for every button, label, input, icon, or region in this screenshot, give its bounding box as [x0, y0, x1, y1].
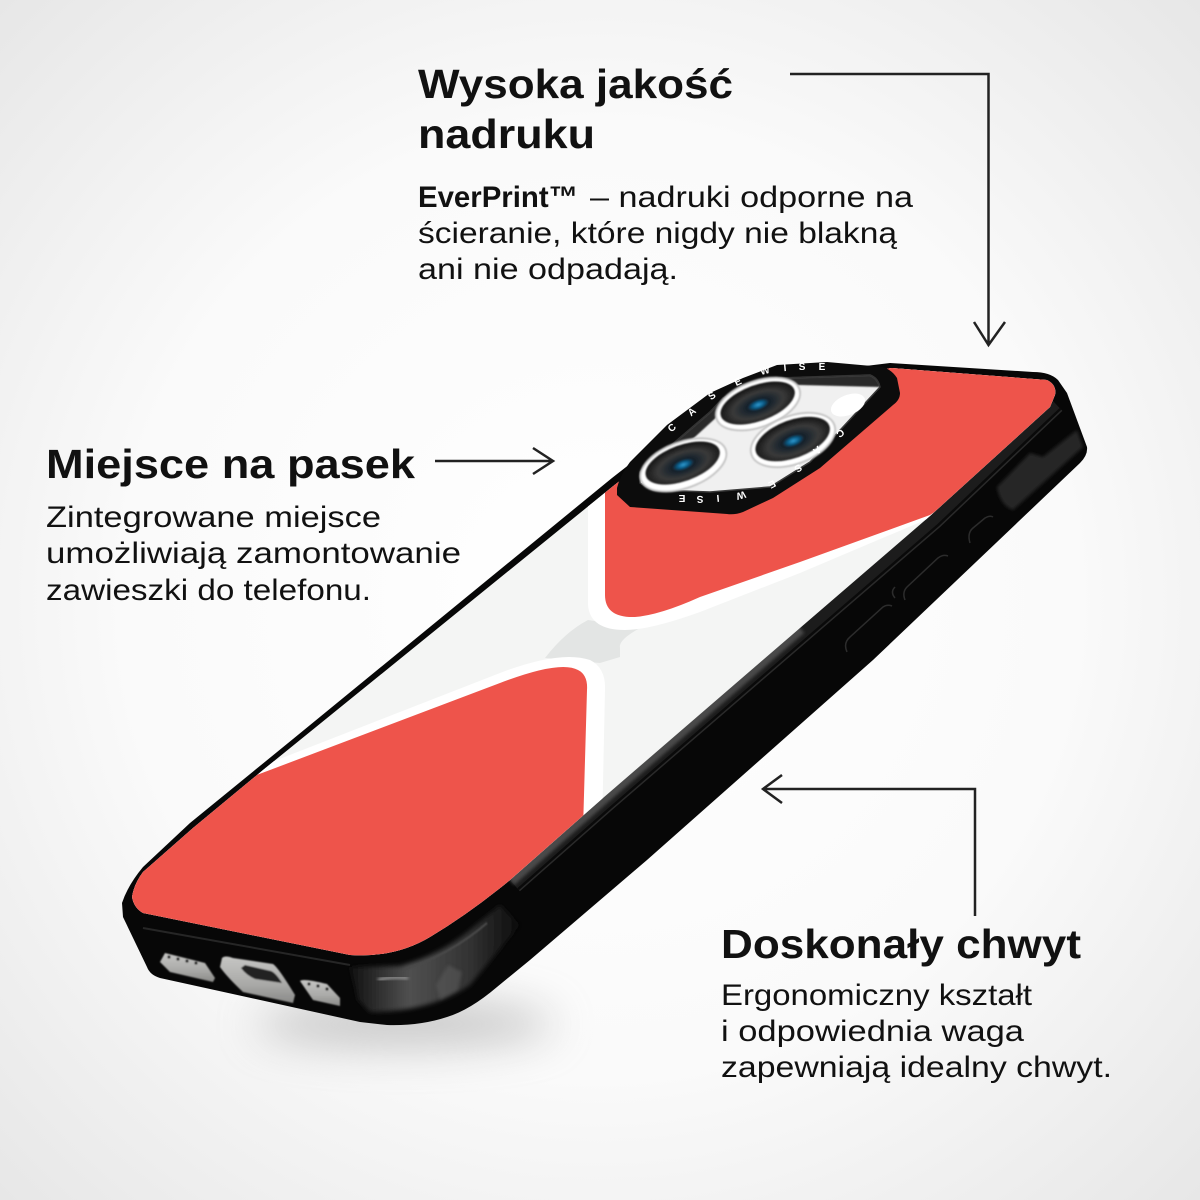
heading: Miejsce na pasek — [46, 441, 415, 487]
back face — [132, 368, 1056, 956]
lens left — [633, 428, 733, 502]
body text — [46, 501, 461, 607]
body text: EverPrint™ — [418, 181, 578, 214]
heading: Doskonały chwyt — [721, 921, 1081, 967]
lens window — [640, 375, 880, 492]
body text: Ergonomiczny kształt — [721, 979, 1033, 1012]
body text — [721, 979, 1112, 1084]
brand text: S — [798, 362, 806, 373]
phone shadow — [255, 1002, 555, 1046]
arrow: print quality — [790, 74, 1005, 345]
frame bevels and sheen — [143, 400, 1052, 1012]
left speaker — [160, 953, 215, 982]
brand text: C — [666, 422, 679, 435]
white band top — [588, 368, 1056, 630]
body text: ścieranie, które nigdy nie blakną — [418, 217, 897, 250]
body text: zapewniają idealny chwyt. — [721, 1051, 1112, 1084]
arrow: strap slot — [435, 448, 553, 474]
charging port — [220, 956, 295, 1003]
brand text: E — [733, 376, 744, 389]
heading: nadruku — [418, 111, 595, 157]
brand text: W — [759, 365, 772, 378]
lens right — [743, 402, 843, 478]
red panel top — [605, 368, 1056, 617]
brand text: E — [678, 492, 685, 503]
body text: umożliwiają zamontowanie — [46, 537, 461, 570]
brand text: C — [833, 426, 846, 439]
logo ghost — [545, 620, 640, 663]
brand text: I — [716, 492, 720, 503]
brand text: S — [696, 493, 704, 504]
body text: i odpowiednia waga — [721, 1015, 1024, 1048]
callout: grip — [721, 921, 1112, 1084]
right speaker — [300, 980, 340, 1006]
callout: print quality — [418, 61, 913, 286]
brand text — [666, 362, 846, 504]
red panel bottom — [132, 667, 588, 956]
body text: – nadruki odporne na — [590, 181, 913, 214]
brand text: E — [766, 477, 777, 490]
body text: Zintegrowane miejsce — [46, 501, 381, 534]
brand text: S — [792, 461, 804, 474]
brand text: E — [819, 362, 826, 373]
body text — [418, 181, 913, 286]
callout: strap slot — [46, 441, 461, 607]
body text: zawieszki do telefonu. — [46, 574, 371, 607]
arrow: grip — [763, 775, 975, 916]
brand text: I — [783, 363, 787, 374]
brand text: A — [686, 406, 699, 419]
lens top — [709, 367, 807, 441]
side switch — [997, 430, 1083, 510]
brand text: W — [734, 488, 747, 501]
phone case — [122, 362, 1088, 1026]
brand text: A — [810, 443, 823, 456]
camera island — [617, 362, 900, 514]
heading: Wysoka jakość — [418, 61, 733, 107]
case frame — [122, 363, 1087, 1025]
heading — [418, 61, 733, 157]
brand text: S — [706, 390, 718, 403]
ports — [160, 953, 340, 1006]
white band bottom — [132, 657, 605, 956]
side buttons — [846, 516, 993, 652]
body text: ani nie odpadają. — [418, 253, 678, 286]
